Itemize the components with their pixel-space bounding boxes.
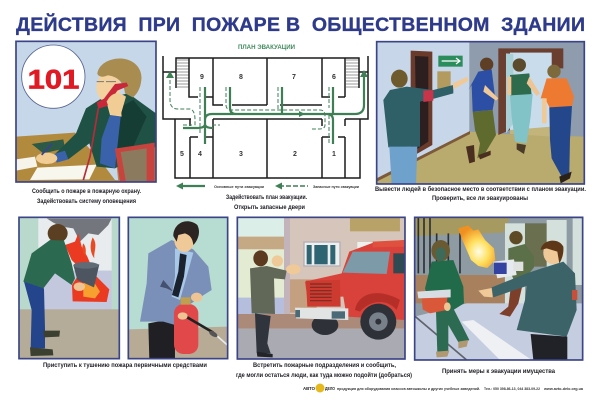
hands	[191, 293, 202, 302]
caption: plan: Задействовать план эвакуации.	[226, 194, 307, 201]
caption: plan: Открыть запасные двери	[234, 205, 305, 211]
panel: evacuation plan	[163, 44, 368, 190]
shirt and tie	[172, 248, 193, 300]
room numbers: 1	[332, 151, 336, 158]
hand	[36, 153, 57, 164]
caption: meet brigade: где могли остаться люди, как туда можно подойти (добраться)	[236, 372, 412, 379]
caption: first-aid means: Приступить к тушению пожара первичными средствами	[43, 363, 207, 369]
footer: publisher line: www.avto-delo.org.ua	[543, 386, 584, 391]
man with monitor	[493, 231, 534, 317]
panel: property evacuation	[415, 217, 583, 360]
frame	[128, 217, 228, 359]
caption: property: Принять меры к эвакуации имущества	[442, 369, 556, 375]
man legs	[148, 318, 175, 359]
spare evacuation routes	[170, 74, 329, 144]
fire truck	[295, 240, 405, 340]
monitor	[493, 259, 517, 278]
room numbers: 3	[239, 151, 243, 158]
glasses	[96, 81, 116, 82]
room numbers: 6	[332, 74, 336, 81]
room numbers: 4	[198, 151, 202, 158]
phone cord	[83, 108, 98, 180]
panel: extinguish with bucket	[19, 217, 119, 359]
icon: 101 circle: 101	[28, 64, 80, 94]
room numbers: 7	[292, 74, 296, 81]
frame	[19, 217, 119, 359]
title: ДЕЙСТВИЯ ПРИ ПОЖАРЕ В ОБЩЕСТВЕННОМ ЗДАНИИ	[16, 12, 585, 36]
plan heading: ПЛАН ЭВАКУАЦИИ	[238, 44, 296, 51]
footer: publisher line: продукция для оборудования классов автошколы и других учебных заведений.	[337, 386, 480, 391]
man	[23, 224, 85, 356]
icon: logo	[316, 384, 324, 392]
smoke	[47, 218, 112, 242]
frame	[237, 217, 405, 359]
caption: report fire: Сообщить о пожаре в пожарную охрану.	[32, 188, 141, 195]
exit sign	[438, 56, 463, 67]
paper on desk	[16, 157, 37, 171]
fire burst	[458, 225, 495, 268]
icon: 101 circle	[22, 45, 85, 108]
face	[96, 75, 120, 100]
footer: publisher line: Тел.: 050 398-86-13, 044 383-09-22	[484, 386, 541, 391]
room numbers: 5	[180, 151, 184, 158]
person directing	[383, 70, 469, 184]
red folder	[115, 143, 155, 182]
hair	[97, 58, 141, 97]
icon: blotter	[32, 139, 65, 153]
stair hatching	[177, 60, 359, 87]
legend: spare routes	[275, 182, 360, 190]
window	[304, 242, 340, 266]
window top	[350, 217, 400, 231]
legend: main routes: Основные пути эвакуации	[214, 185, 265, 189]
legend: main routes	[176, 182, 265, 190]
frame	[16, 41, 156, 182]
doorway	[498, 48, 563, 135]
panel: evacuating people	[377, 42, 584, 184]
man pointing	[478, 241, 577, 360]
woman with box	[417, 240, 469, 357]
open notebook	[30, 165, 97, 180]
frame	[415, 217, 583, 360]
blue blouse	[100, 115, 121, 168]
panel: call 101	[16, 41, 156, 182]
caption: plan	[226, 194, 307, 211]
panel: meet fire brigade	[237, 217, 405, 359]
flames	[65, 233, 109, 302]
person blue shirt	[466, 58, 498, 163]
caption: evacuate people	[375, 186, 586, 202]
footer: publisher line	[303, 384, 584, 392]
head	[173, 221, 199, 252]
door left	[411, 51, 432, 157]
phone	[97, 83, 128, 109]
extinguisher	[174, 297, 227, 354]
main evacuation routes	[183, 74, 364, 144]
caption: meet brigade: Встретить пожарные подразделения и сообщить,	[253, 362, 396, 369]
holding hand	[107, 93, 126, 115]
man	[250, 250, 301, 357]
room numbers: 8	[239, 74, 243, 81]
person orange shirt	[541, 65, 574, 183]
woman jacket	[55, 93, 156, 168]
caption: evacuate people: Вывести людей в безопасное место в соответствии с планом эвакуации.	[375, 186, 586, 193]
room numbers: 9	[200, 74, 204, 81]
box	[422, 297, 447, 313]
notice board	[437, 71, 451, 91]
floor plan walls	[163, 56, 368, 178]
man jacket	[140, 240, 212, 325]
window bars	[418, 217, 460, 273]
bucket	[73, 262, 99, 287]
room numbers	[180, 74, 336, 158]
panel: extinguisher	[128, 217, 228, 359]
caption: meet brigade	[236, 362, 412, 379]
footer: publisher line: АВТО	[303, 386, 315, 391]
frame	[377, 42, 584, 184]
legend: spare routes: Запасные пути эвакуации	[313, 185, 360, 189]
caption: report fire	[32, 188, 141, 205]
room numbers: 2	[293, 151, 297, 158]
footer: publisher line: ДЕЛО	[325, 386, 335, 391]
caption: report fire: Задействовать систему оповещения	[37, 198, 136, 205]
person green top	[507, 58, 540, 154]
caption: evacuate people: Проверить, все ли эвакуированы	[432, 196, 528, 202]
